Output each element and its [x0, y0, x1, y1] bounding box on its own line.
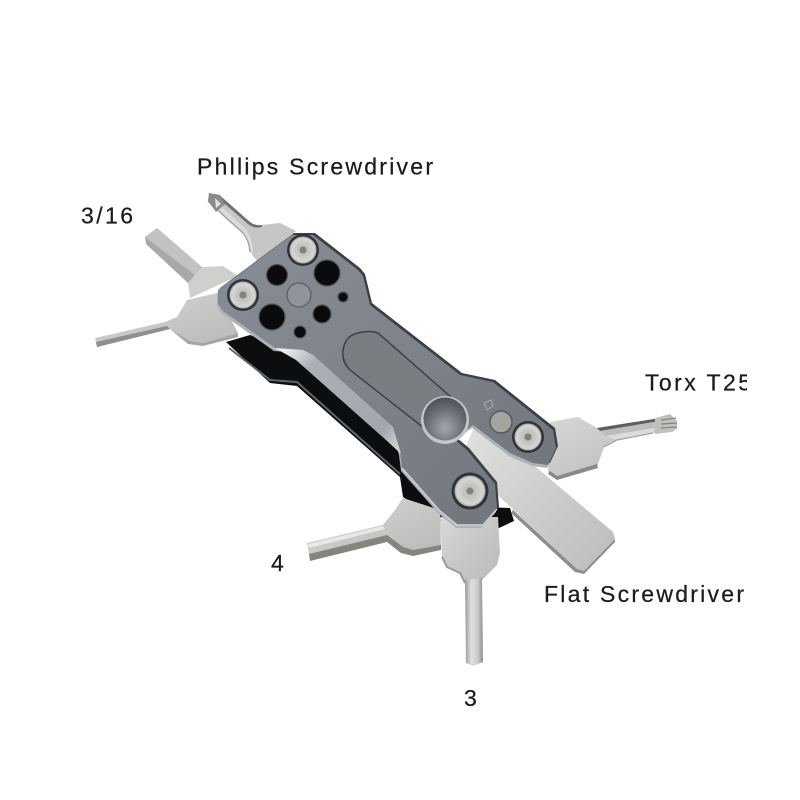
tool: 3/16 hex key — [145, 228, 238, 298]
plate top face — [218, 235, 556, 525]
tool: left hex key — [95, 293, 238, 347]
tool: hex key 4 — [307, 498, 441, 561]
top-left screw — [227, 279, 259, 311]
label: Torx T25: Torx T25 — [645, 370, 751, 396]
tool: flat screwdriver blade — [460, 418, 615, 574]
main plate — [217, 233, 558, 528]
lower body grey rim — [229, 348, 400, 474]
multi-tool infographic — [82, 157, 747, 706]
small round rivet — [490, 411, 512, 433]
slot recess — [343, 332, 452, 428]
label: 3/16: 3/16 — [81, 202, 133, 228]
label: 3: 3 — [464, 685, 477, 711]
tool: Torx T25 bit — [548, 414, 677, 480]
plate upper dark edge — [220, 233, 558, 523]
top-right screw — [287, 234, 319, 266]
plate lower light edge — [217, 238, 555, 528]
label: 4: 4 — [271, 550, 284, 576]
bevel highlight — [275, 348, 401, 454]
tool: hex key 3 — [440, 517, 500, 666]
dark lower body — [226, 335, 514, 528]
lever edge highlight — [402, 468, 497, 525]
label: Phillips screwdriver: Phllips Screwdriver — [197, 154, 433, 180]
pivot button — [421, 396, 469, 444]
small recessed circle — [287, 283, 311, 307]
tool: Phillips bit — [208, 193, 296, 261]
label: Flat screwdriver: Flat Screwdriver — [544, 581, 744, 607]
bottom screw — [452, 472, 488, 510]
logo mark — [484, 400, 493, 410]
holes — [259, 260, 348, 338]
right screw — [512, 421, 544, 453]
